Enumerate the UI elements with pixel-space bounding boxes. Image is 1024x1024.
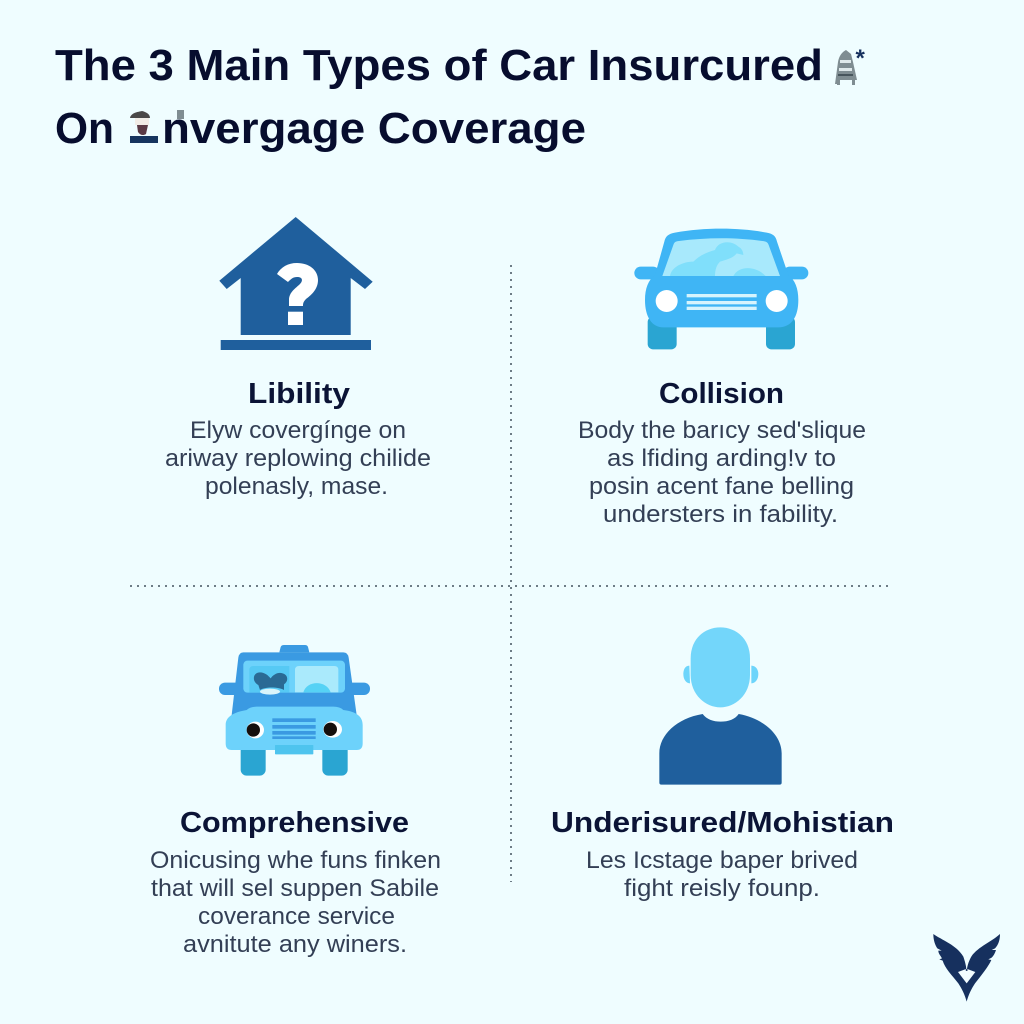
text block: comprehensive description bbox=[150, 847, 441, 958]
panel: comprehensive bbox=[150, 645, 441, 958]
text block: comprehensive description: that will sel suppen Sabile bbox=[151, 875, 439, 902]
heading: liability: Libility bbox=[248, 378, 350, 410]
title: nvergage Coverage bbox=[162, 104, 586, 153]
icon: front truck bbox=[219, 645, 370, 776]
text block: collision description: Body the barıcy sed'slique bbox=[578, 417, 866, 444]
icon: small title rocket: * bbox=[856, 45, 866, 72]
text block: collision description: as lfiding arding!v to bbox=[607, 445, 836, 472]
text block: liability description bbox=[165, 417, 431, 500]
text block: liability description: Elyw covergínge on bbox=[190, 417, 406, 444]
title: On bbox=[55, 104, 114, 153]
heading: comprehensive: Comprehensive bbox=[180, 807, 409, 839]
text block: comprehensive description: Onicusing whe funs finken bbox=[150, 847, 441, 874]
text block: liability description: ariway replowing chilide bbox=[165, 445, 431, 472]
icon: small title rocket bbox=[835, 45, 866, 85]
text block: comprehensive description: coverance service bbox=[198, 903, 395, 930]
heading: underinsured motorist: Underisured/Mohistian bbox=[551, 807, 894, 839]
icon: eagle wings logo bbox=[933, 934, 1000, 1002]
icon: front car bbox=[634, 229, 808, 349]
text block: collision description: understers in fability. bbox=[603, 501, 838, 528]
title: The 3 Main Types of Car Insurcured bbox=[55, 41, 823, 90]
icon: house with question mark bbox=[219, 217, 373, 350]
text block: collision description: posin acent fane belling bbox=[589, 473, 854, 500]
panel: liability bbox=[165, 217, 431, 500]
text block: underinsured description: Les Icstage baper brived bbox=[586, 847, 858, 874]
icon: person bbox=[659, 627, 782, 785]
icon: small title portrait bbox=[130, 110, 184, 143]
text block: comprehensive description: avnitute any winers. bbox=[183, 931, 407, 958]
title bbox=[55, 41, 823, 153]
text block: underinsured description bbox=[586, 847, 858, 902]
text block: underinsured description: fight reisly founp. bbox=[624, 875, 820, 902]
panel: underinsured motorist bbox=[551, 627, 894, 902]
heading: collision: Collision bbox=[659, 378, 784, 410]
text block: liability description: polenasly, mase. bbox=[205, 473, 388, 500]
text block: collision description bbox=[578, 417, 866, 528]
panel: collision bbox=[578, 229, 866, 528]
